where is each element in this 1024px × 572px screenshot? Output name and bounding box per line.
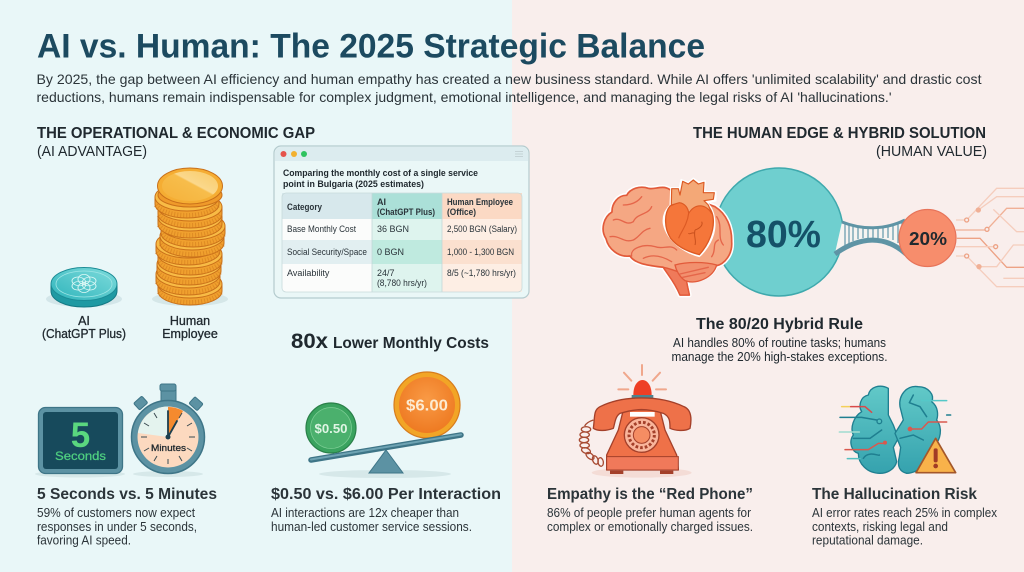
title: AI vs. Human: The 2025 Strategic Balance bbox=[37, 28, 705, 66]
comparison table: 24/7 bbox=[377, 268, 395, 278]
coin: $6.00 bbox=[394, 372, 460, 438]
intro text block bbox=[36, 71, 982, 105]
background: right panel bbox=[512, 0, 1024, 572]
heading: 80x lower monthly costs bbox=[291, 330, 489, 353]
heart bbox=[663, 178, 716, 257]
comparison table: (ChatGPT Plus) bbox=[377, 207, 435, 217]
circle: 20 percent bbox=[899, 210, 956, 266]
comparison table: Human Employee bbox=[447, 197, 513, 207]
label: AI: (ChatGPT Plus) bbox=[42, 327, 126, 341]
text block: 5 seconds vs 5 minutes bbox=[37, 486, 217, 548]
heading: operational and economic gap: THE OPERATIONAL & ECONOMIC GAP bbox=[37, 125, 315, 142]
comparison table: 8/5 (~1,780 hrs/yr) bbox=[447, 268, 516, 278]
icon: 5 seconds display bbox=[35, 408, 125, 478]
coin: $0.50 bbox=[306, 403, 356, 453]
table title: Comparing the monthly cost of a single service bbox=[283, 168, 478, 179]
text block: 5 seconds vs 5 minutes: 59% of customers now expect bbox=[37, 506, 195, 520]
circle: 80 percent bbox=[715, 168, 843, 296]
icon: AI coin bbox=[46, 268, 122, 307]
text block: cost per interaction: AI interactions are 12x cheaper than bbox=[271, 506, 459, 520]
panel: monthly cost table window bbox=[274, 146, 529, 298]
circle: 20 percent: 20% bbox=[909, 229, 947, 249]
heading: 80x lower monthly costs: 80x bbox=[291, 330, 328, 353]
comparison table: (Office) bbox=[447, 207, 476, 217]
text block: hallucination risk: AI error rates reach 25% in complex bbox=[812, 506, 998, 520]
icon: circuit traces bbox=[956, 188, 1024, 287]
intro text block: By 2025, the gap between AI efficiency and human empathy has created a new business standard. While AI offers 'unlimited scalability' and drastic cost bbox=[36, 71, 982, 87]
heading: human edge and hybrid solution bbox=[693, 125, 987, 160]
heading: human edge and hybrid solution: (HUMAN VALUE) bbox=[876, 143, 987, 160]
icon: 5 minutes stopwatch bbox=[132, 384, 204, 477]
heading: operational and economic gap: (AI ADVANTAGE) bbox=[37, 143, 147, 160]
icon: bridge linking 80 and 20 bbox=[835, 220, 906, 254]
label: AI bbox=[42, 314, 126, 341]
icon: brain and heart bbox=[603, 178, 732, 295]
text block: hallucination risk: reputational damage. bbox=[812, 534, 923, 548]
table title: point in Bulgaria (2025 estimates) bbox=[283, 179, 424, 190]
text block: 5 seconds vs 5 minutes: responses in under 5 seconds, bbox=[37, 520, 197, 534]
cost comparison: AI coin vs human coin stack bbox=[42, 168, 228, 341]
circle: 80 percent: 80% bbox=[746, 214, 821, 256]
text block: 5 seconds vs 5 minutes: 5 Seconds vs. 5 Minutes bbox=[37, 486, 217, 503]
label: human employee: Employee bbox=[162, 327, 218, 341]
text block: cost per interaction: human-led customer service sessions. bbox=[271, 520, 472, 534]
table title bbox=[283, 168, 478, 190]
background: left panel bbox=[0, 0, 512, 572]
comparison table: AI bbox=[377, 197, 386, 207]
text block: hallucination risk bbox=[812, 486, 998, 548]
label: AI: AI bbox=[78, 314, 90, 328]
comparison table: (8,780 hrs/yr) bbox=[377, 278, 427, 288]
label: human employee: Human bbox=[170, 314, 210, 328]
text block: empathy is the red phone: 86% of people prefer human agents for bbox=[547, 506, 751, 520]
comparison table: 2,500 BGN (Salary) bbox=[447, 224, 517, 234]
text block: 80/20 hybrid rule: AI handles 80% of routine tasks; humans bbox=[673, 336, 886, 350]
text block: 80/20 hybrid rule bbox=[672, 316, 888, 364]
comparison table bbox=[282, 193, 522, 292]
heading: human edge and hybrid solution: THE HUMAN EDGE & HYBRID SOLUTION bbox=[693, 125, 986, 142]
text block: hallucination risk: The Hallucination Risk bbox=[812, 486, 977, 503]
comparison table: 0 BGN bbox=[377, 247, 404, 257]
icon: human coin stack bbox=[152, 168, 228, 306]
text block: hallucination risk: contexts, risking legal and bbox=[812, 520, 948, 534]
text block: 80/20 hybrid rule: manage the 20% high-stakes exceptions. bbox=[672, 350, 888, 364]
comparison table: Social Security/Space bbox=[287, 247, 367, 257]
label: human employee bbox=[162, 314, 218, 341]
comparison table: Base Monthly Cost bbox=[287, 224, 356, 234]
icon: 5 minutes stopwatch: Minutes bbox=[151, 443, 186, 454]
coin: $0.50: $0.50 bbox=[314, 422, 348, 436]
icon: fractured AI brain with warning bbox=[839, 386, 956, 473]
heading: 80x lower monthly costs: Lower Monthly Costs bbox=[333, 335, 489, 352]
icon: 5 seconds display: Seconds bbox=[55, 451, 106, 463]
text block: empathy is the red phone: complex or emotionally charged issues. bbox=[547, 520, 753, 534]
text block: empathy is the red phone: Empathy is the “Red Phone” bbox=[547, 486, 753, 503]
text block: cost per interaction bbox=[271, 486, 501, 534]
text block: cost per interaction: $0.50 vs. $6.00 Per Interaction bbox=[271, 486, 501, 503]
intro text block: reductions, humans remain indispensable for complex judgment, emotional intelligence, and managing the legal risks of AI 'hallucinations.' bbox=[36, 89, 892, 105]
text block: 5 seconds vs 5 minutes: favoring AI speed. bbox=[37, 534, 131, 548]
text block: 80/20 hybrid rule: The 80/20 Hybrid Rule bbox=[696, 316, 863, 333]
heading: operational and economic gap bbox=[37, 125, 315, 160]
warning triangle bbox=[916, 438, 956, 473]
comparison table: 1,000 - 1,300 BGN bbox=[447, 247, 514, 257]
text block: empathy is the red phone bbox=[547, 486, 753, 534]
coin: $6.00: $6.00 bbox=[406, 398, 448, 414]
icon: 5 seconds display: 5 bbox=[71, 416, 90, 455]
comparison table: Availability bbox=[287, 268, 330, 278]
icon: balance scale with coins bbox=[306, 372, 461, 478]
comparison table: Category bbox=[287, 202, 322, 212]
comparison table: 36 BGN bbox=[377, 224, 409, 234]
icon: red phone bbox=[579, 365, 692, 478]
